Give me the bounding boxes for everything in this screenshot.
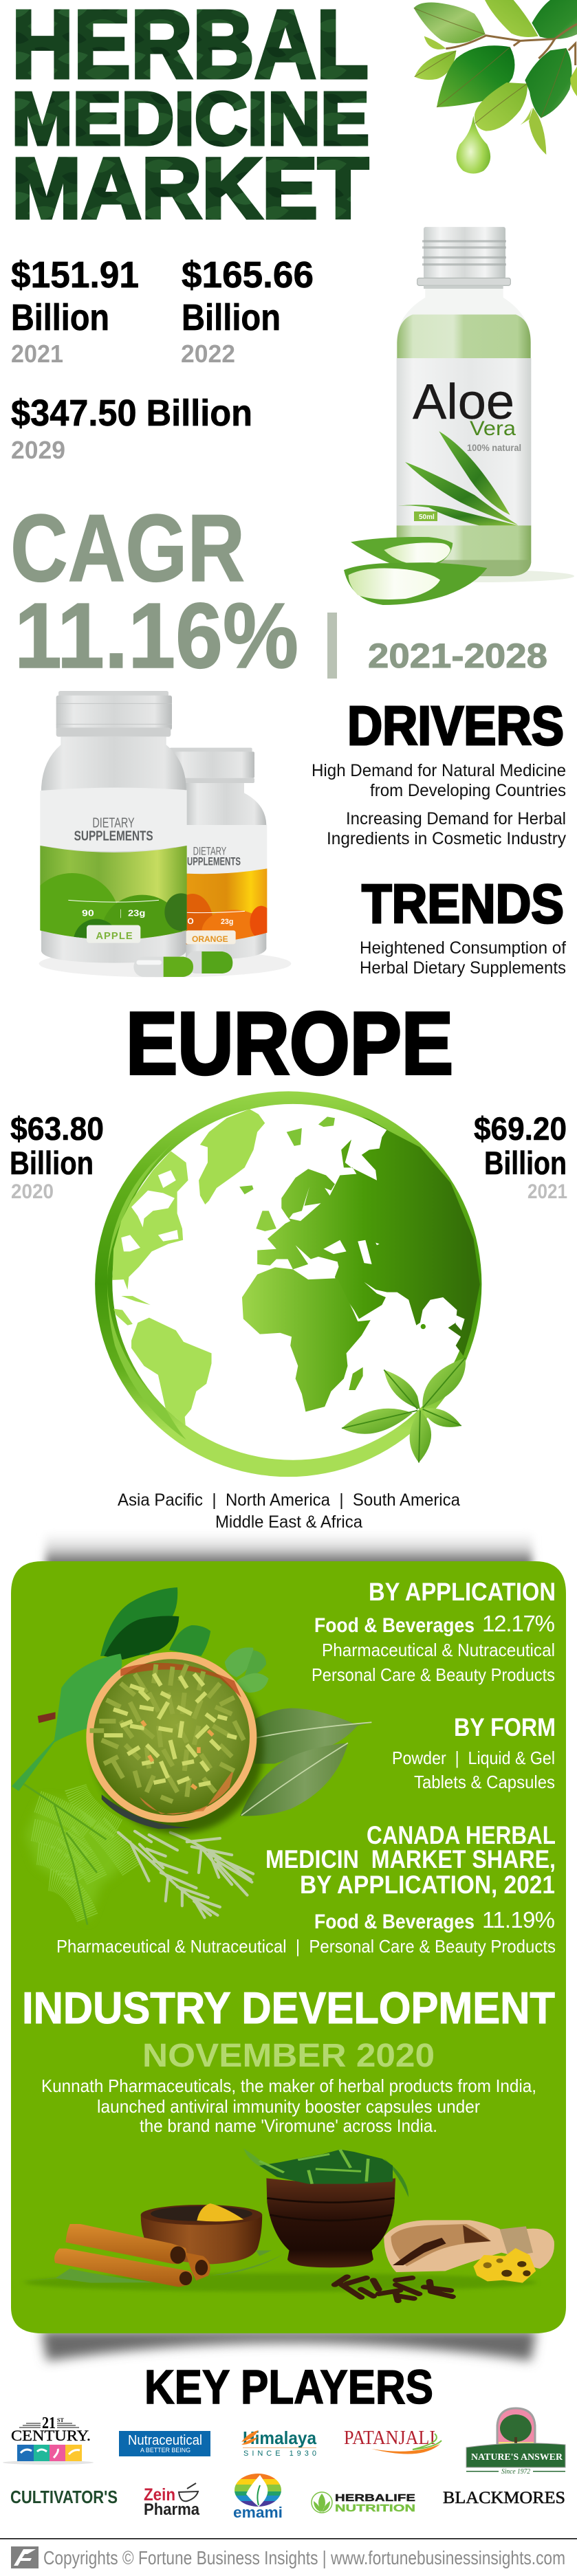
logo: Herbalife Nutrition: HERBALIFE [335, 2492, 415, 2504]
panel: green market segments [11, 1561, 566, 2333]
icon: aloe vera bottle: Vera [470, 417, 516, 440]
text: application stats: Food & Beverages [314, 1614, 475, 1637]
icon: green drop [457, 115, 490, 173]
stat: 2029 market value: 2029 [11, 436, 65, 464]
mortar with herbs [243, 2148, 409, 2267]
logo: Nutraceutical [119, 2431, 210, 2456]
title line: Market: MARKET [12, 141, 369, 236]
icon: aloe vera bottle: 100% natural [467, 442, 521, 453]
text: Canada stats [56, 1907, 556, 1957]
CAGR figure: CAGR [10, 495, 245, 602]
stat: Europe 2020 [10, 1110, 104, 1203]
stat: Europe 2020: Billion [10, 1145, 94, 1181]
illustration: herbs and spices [19, 2148, 554, 2301]
logo: Nature's Answer: NATURE'S ANSWER [471, 2452, 563, 2463]
logo: Nature's Answer [466, 2408, 565, 2476]
logo: Nutraceutical: A BETTER BEING [140, 2447, 190, 2454]
apple bottle: 23g [128, 907, 145, 918]
title [12, 0, 369, 236]
footer rule [0, 2538, 577, 2540]
stat: Europe 2020: 2020 [11, 1180, 54, 1203]
stat: Europe 2020: $63.80 [10, 1110, 104, 1147]
cinnamon sticks [54, 2224, 210, 2287]
continent: Africa [242, 1267, 371, 1411]
text: Canada stats: 11.19% [482, 1907, 555, 1933]
logo: 21st Century [3, 2414, 94, 2465]
text: driver list: Increasing Demand for Herbal [346, 809, 566, 828]
logo: Emami: emami [233, 2504, 283, 2521]
leaf under cinnamon [19, 2269, 154, 2283]
CAGR figure [10, 495, 547, 687]
text: application stats: 12.17% [482, 1611, 555, 1636]
logo: Himalaya: SINCE 1930 [243, 2450, 316, 2458]
heading: by application: BY APPLICATION [369, 1578, 556, 1606]
logo: Nature's Answer: Since 1972 [501, 2468, 530, 2476]
heading: Europe: EUROPE [126, 994, 453, 1093]
logo: Zein Pharma: Pharma [144, 2500, 200, 2519]
stat: Europe 2021: 2021 [527, 1180, 567, 1203]
continent: North America [112, 1151, 188, 1290]
text: trend list [360, 938, 566, 978]
capsules [133, 951, 232, 977]
heading: Canada share [265, 1821, 556, 1899]
stat: 2021 market value [11, 254, 139, 368]
stat: Europe 2021 [474, 1110, 567, 1203]
text: development description: the brand name 'Viromune' across India. [140, 2115, 437, 2136]
apple bottle [40, 691, 187, 962]
text: development description: Kunnath Pharmaceuticals, the maker of herbal products from India, [41, 2076, 536, 2096]
text: Canada stats: Food & Beverages [314, 1911, 475, 1933]
apple bottle: 90 [82, 907, 94, 918]
stat: 2022 market value: 2022 [181, 340, 235, 368]
text: application stats: Pharmaceutical & Nutraceutical [322, 1640, 555, 1660]
logo: Zein Pharma: Zein [144, 2485, 175, 2505]
text: driver list [312, 761, 566, 848]
text: form types: Powder | Liquid & Gel [392, 1748, 555, 1768]
fern [23, 1784, 133, 1925]
wooden bowl [141, 2203, 262, 2264]
orange bottle: DIETARY [193, 844, 226, 857]
continent: South America [131, 1318, 212, 1426]
continent: Greenland [199, 1109, 265, 1204]
text: other regions: Middle East & Africa [215, 1512, 362, 1532]
text: form types: Tablets & Capsules [414, 1772, 555, 1792]
orange bottle: O [187, 916, 194, 926]
logo: Zein Pharma [144, 2483, 200, 2519]
bottle label text: Aloe [413, 375, 514, 430]
text: application stats: Personal Care & Beauty Products [312, 1664, 555, 1685]
heading: Canada share: BY APPLICATION, 2021 [300, 1871, 555, 1899]
bowl [94, 1663, 264, 1834]
apple bottle: DIETARY [92, 815, 135, 830]
stat: 2021 market value: Billion [11, 297, 109, 338]
text: form types [392, 1748, 555, 1792]
orange bottle: 23g [221, 918, 233, 926]
icon: aloe vera bottle: 50ml [419, 514, 435, 521]
text: trend list: Herbal Dietary Supplements [360, 958, 566, 978]
stat: 2022 market value: Billion [182, 297, 281, 338]
icon: leaves on globe [342, 1358, 466, 1462]
stat: 2022 market value [181, 254, 314, 368]
logo: Herbalife Nutrition [312, 2492, 415, 2514]
orange bottle [170, 748, 273, 959]
heading: by form: BY FORM [454, 1713, 556, 1741]
icon: leaf branch with drop [414, 0, 577, 173]
footer logo [11, 2546, 39, 2568]
logo: Nutraceutical: Nutraceutical [128, 2433, 202, 2448]
text: driver list: Ingredients in Cosmetic Industry [327, 829, 566, 848]
stat: 2022 market value: $165.66 [182, 254, 314, 296]
logo: Emami [233, 2474, 283, 2521]
text: trend list: Heightened Consumption of [360, 938, 566, 958]
stat: 2021 market value: $151.91 [11, 254, 139, 296]
scoop [384, 2220, 554, 2272]
logo: Cultivator's: CULTIVATOR'S [10, 2487, 118, 2507]
stat: 2029 market value: $347.50 Billion [11, 393, 252, 434]
logo: 21st Century: 21 [42, 2414, 56, 2432]
logo: Herbalife Nutrition: NUTRITION [335, 2502, 415, 2514]
logo: Himalaya [241, 2428, 317, 2458]
aloe slices [344, 537, 487, 605]
panel top shadow [45, 1533, 532, 1574]
stat: 2021 market value: 2021 [11, 340, 63, 368]
text: driver list: High Demand for Natural Medicine [312, 761, 566, 780]
logo: 21st Century: ST [57, 2417, 64, 2423]
text: development description: launched antiviral immunity booster capsules under [97, 2096, 480, 2117]
continent: Eurasia [256, 1211, 276, 1231]
heading: date: NOVEMBER 2020 [142, 2038, 435, 2074]
flowers [473, 2248, 536, 2283]
cloves [335, 2277, 453, 2301]
apple bottle: APPLE [96, 931, 133, 942]
icon: green globe [95, 1091, 481, 1477]
orange bottle: ORANGE [192, 934, 228, 944]
panel bottom shadow [41, 2331, 536, 2361]
apple bottle: SUPPLEMENTS [74, 828, 153, 844]
text: development description [41, 2076, 536, 2136]
logo: Patanjali: PATANJALI [344, 2428, 435, 2449]
logo: Himalaya: Himalaya [243, 2428, 317, 2448]
text: other regions [118, 1490, 460, 1532]
icon: dietary supplement bottles [25, 691, 291, 978]
logo: Blackmores: BLACKMORES [443, 2489, 565, 2507]
CAGR figure: 11.16% [14, 584, 298, 687]
logo: 21st Century: CENTURY. [11, 2427, 91, 2444]
title line: Medicine: MEDICINE [12, 77, 369, 161]
aloe leaves on label [398, 431, 518, 525]
text: application stats [312, 1611, 555, 1685]
CAGR figure: 2021-2028 [368, 637, 547, 675]
illustration: herb bowl [12, 1587, 371, 1925]
stat: 2029 market value [11, 393, 252, 464]
orange bottle: UPPLEMENTS [187, 855, 241, 868]
heading: key players: KEY PLAYERS [144, 2360, 433, 2414]
text: driver list: from Developing Countries [370, 781, 566, 800]
rosemary [118, 1831, 253, 1917]
stat: Europe 2021: $69.20 [474, 1110, 567, 1147]
text: other regions: Asia Pacific | North America | South America [118, 1490, 460, 1510]
icon: aloe vera bottle [344, 227, 574, 605]
